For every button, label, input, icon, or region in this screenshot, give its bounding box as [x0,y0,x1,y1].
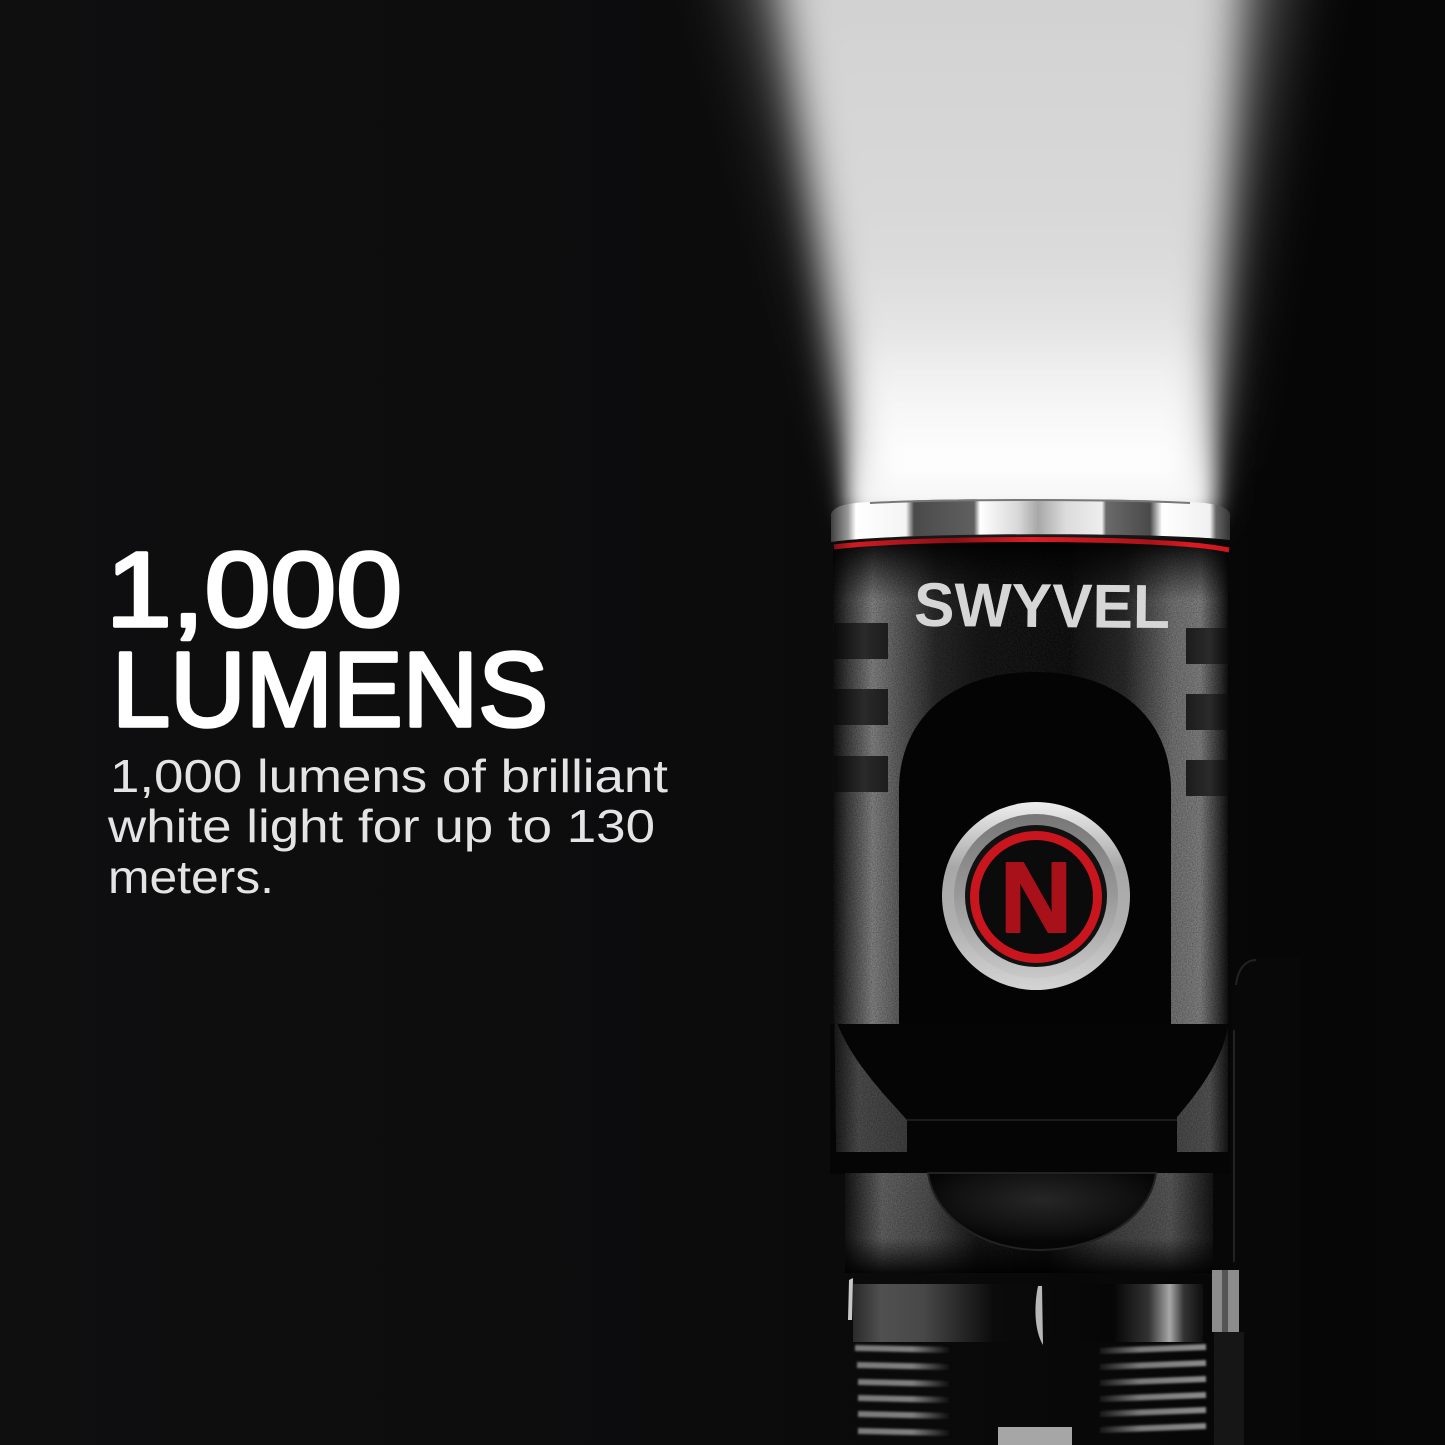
lower collar [845,1173,1213,1273]
left thread [855,1348,950,1433]
bottom metal tab [998,1427,1072,1445]
heading [106,531,548,749]
barrel ring [848,1270,1239,1345]
red accent line [834,540,1229,550]
power button [942,802,1130,990]
left shoulder [834,1000,907,1152]
description text [107,750,668,903]
heading: LUMENS [112,631,548,749]
light beam [735,0,1285,515]
hinge line [907,1119,1177,1121]
right side slots [1186,628,1229,796]
black inset panel [899,672,1171,1030]
button N mark: N [1000,842,1072,954]
lower black cutout [830,1024,1230,1174]
collar dome recess [928,1173,1156,1250]
left side slots [834,623,888,792]
brand logo: SWYVEL [914,571,1170,642]
pocket clip [1214,958,1300,1445]
flashlight head ring [831,499,1230,542]
heading: 1,000 [106,531,402,649]
description text: white light for up to 130 [107,800,655,852]
description text: 1,000 lumens of brilliant [110,750,668,802]
flashlight body [833,539,1228,1027]
flashlight [830,499,1300,1445]
description text: meters. [108,851,274,903]
right shoulder [1177,1027,1228,1152]
right thread [1100,1347,1206,1430]
